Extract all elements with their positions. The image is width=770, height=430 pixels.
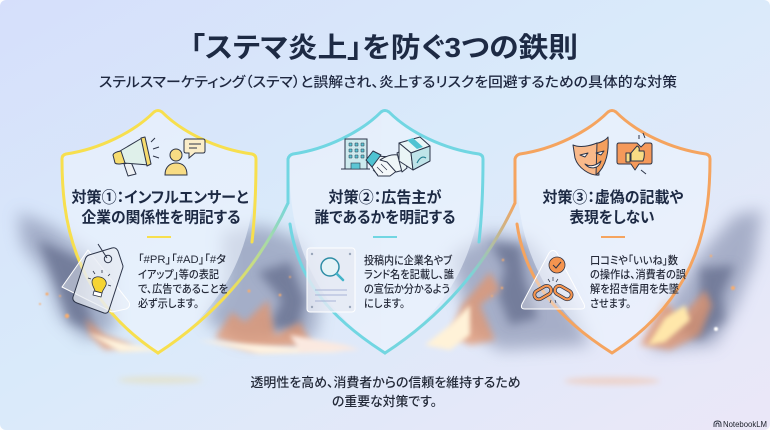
icon: tag with light bulb xyxy=(62,244,130,313)
icon: building xyxy=(341,139,370,169)
body text: にします。 xyxy=(364,297,405,310)
divider xyxy=(147,236,171,238)
closing message: 透明性を高め、消費者からの信頼を維持するため xyxy=(250,375,520,390)
icon: handshake xyxy=(366,150,407,176)
body text: させます。 xyxy=(590,297,631,310)
heading: 対策②：広告主が xyxy=(328,188,442,206)
glass fill: shields xyxy=(62,110,710,353)
body text: の宣伝か分かるよう xyxy=(364,282,450,296)
heading: 対策①：インフルエンサーと xyxy=(72,188,249,206)
heading xyxy=(72,188,249,226)
bottom glows xyxy=(118,376,660,385)
shield 1: yellow xyxy=(62,110,288,353)
shield 3: orange xyxy=(515,110,710,353)
subtitle: ステルスマーケティング（ステマ）と誤解され、炎上するリスクを回避するための具体的な対策 xyxy=(99,74,677,90)
icon: parcel xyxy=(399,137,430,170)
closing message: の重要な対策です。 xyxy=(332,394,437,409)
body text: の操作は、消費者の誤 xyxy=(590,267,686,281)
heading: 対策③：虚偽の記載や xyxy=(542,188,684,206)
body text: イアップ」等の表記 xyxy=(138,267,219,281)
shield 2: teal xyxy=(288,110,515,353)
body text xyxy=(590,253,686,310)
icon: person with speech bubble xyxy=(165,139,205,175)
heading: 企業の関係性を明記する xyxy=(82,208,240,226)
title: 「ステマ炎上」を防ぐ3つの鉄則 xyxy=(190,32,578,63)
panel: measure 2 xyxy=(307,137,456,312)
icon: megaphone xyxy=(113,137,159,176)
heading xyxy=(314,188,456,226)
body text: で、広告であることを xyxy=(138,282,228,296)
body text xyxy=(364,253,454,310)
body text: ランド名を記載し、誰 xyxy=(364,267,454,281)
body text: 投稿内に企業名やブ xyxy=(364,253,453,267)
body text: 解を招き信用を失墜 xyxy=(590,282,679,296)
heading: 表現をしない xyxy=(570,208,654,226)
body text: 口コミや「いいね」数 xyxy=(590,253,678,267)
icon: warning triangle with broken chain xyxy=(521,250,585,309)
body text: 「#PR」「#AD」「#タ xyxy=(138,253,226,266)
body text xyxy=(138,253,228,310)
divider xyxy=(373,236,397,238)
panel: measure 1 xyxy=(62,137,249,313)
closing message xyxy=(250,375,520,409)
icon: cracked like bubble xyxy=(617,133,652,174)
logo: NotebookLM: NotebookLM xyxy=(723,420,767,429)
body text: 必ず示します。 xyxy=(138,296,199,310)
panel: measure 3 xyxy=(521,133,686,310)
icon: theatre masks xyxy=(573,137,608,175)
icon: magnifier document card xyxy=(307,248,355,312)
heading xyxy=(542,188,684,226)
smoke and flames xyxy=(18,210,762,354)
divider xyxy=(601,236,625,238)
heading: 誰であるかを明記する xyxy=(314,208,456,226)
